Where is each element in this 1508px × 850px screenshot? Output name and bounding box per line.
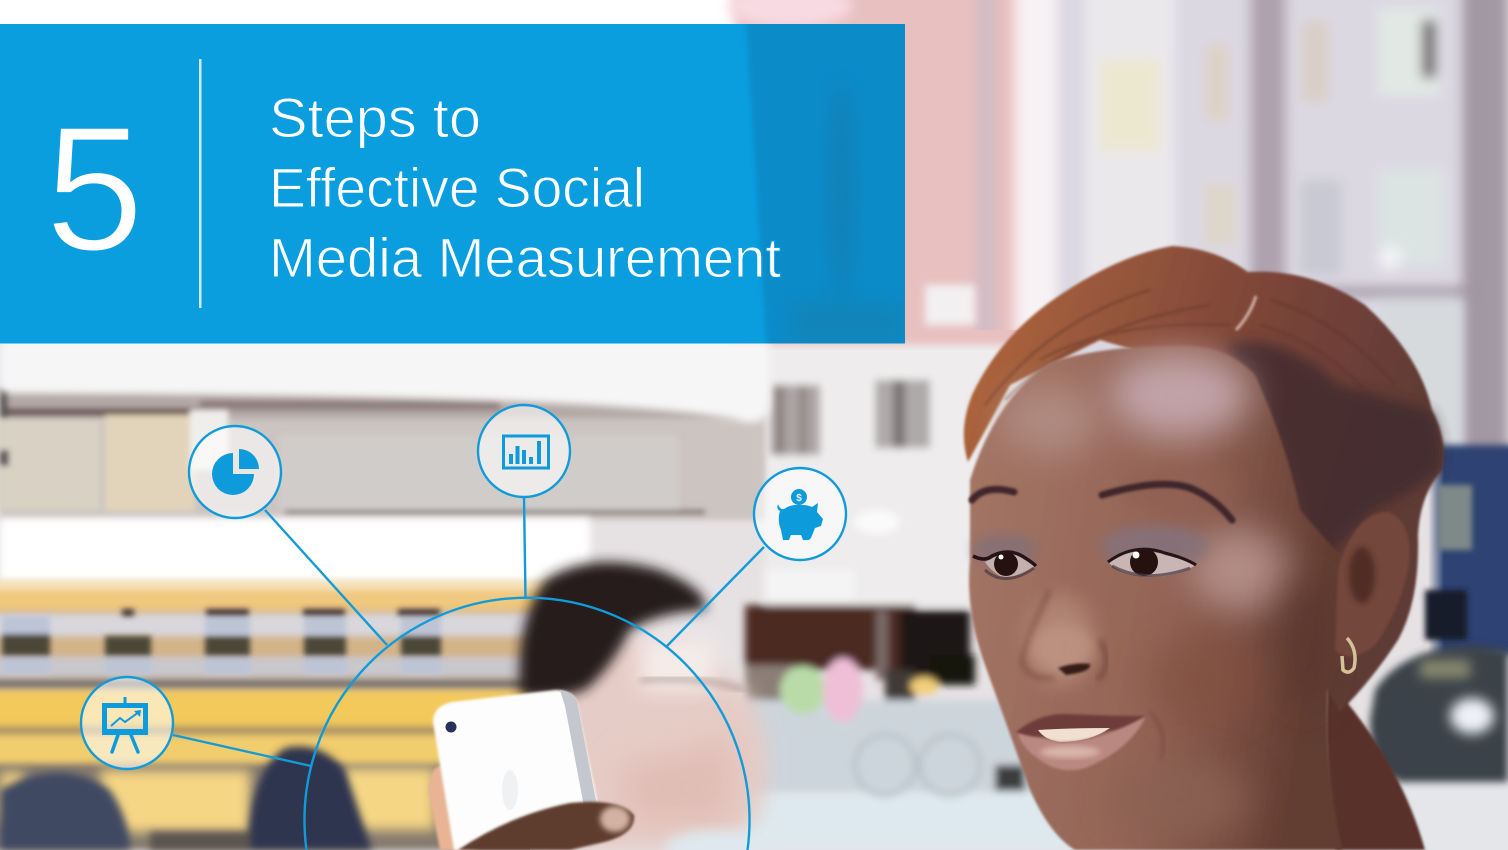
hair strands <box>985 290 1395 405</box>
icon: presentation board <box>81 677 173 769</box>
hair parting <box>1236 296 1256 330</box>
background: buildings <box>0 0 1508 470</box>
title panel <box>0 24 905 344</box>
darker side of hair <box>1225 342 1441 560</box>
eyebrows <box>972 484 1232 520</box>
background: blurred passers-by <box>0 746 372 850</box>
translucent right side of panel <box>745 24 905 344</box>
connector lines and hub circle <box>173 497 764 850</box>
face <box>969 346 1350 850</box>
background: school bus <box>0 518 590 850</box>
big numeral: 5 <box>45 89 144 288</box>
icon: piggy bank <box>754 468 846 560</box>
woman portrait <box>964 246 1508 850</box>
background: awning <box>0 340 770 520</box>
phone <box>433 690 597 850</box>
divider <box>199 59 202 308</box>
title text: Effective Social <box>269 156 645 219</box>
nose <box>1022 590 1106 680</box>
thumb <box>458 802 634 850</box>
eye shadow <box>1101 526 1209 566</box>
title text: Media Measurement <box>269 226 781 289</box>
face highlights <box>1000 353 1331 840</box>
title text <box>269 86 781 289</box>
phone in hand <box>428 690 634 850</box>
fingers and palm <box>428 765 478 850</box>
icon: bar chart <box>478 405 570 497</box>
background car and blue bus behind portrait <box>1370 445 1508 850</box>
eyes <box>973 548 1196 579</box>
background: blurred man <box>519 562 768 850</box>
earring <box>1342 638 1355 672</box>
background: white building and shop front <box>740 285 1080 850</box>
hair <box>964 246 1444 712</box>
panel background <box>0 24 905 344</box>
network diagram <box>81 405 846 850</box>
icon: pie chart <box>189 426 281 518</box>
mouth <box>1016 714 1146 770</box>
ponytail <box>1326 680 1425 850</box>
ear <box>1335 512 1410 656</box>
icon: piggy bank: $ <box>796 493 802 504</box>
title text: Steps to <box>269 86 481 149</box>
